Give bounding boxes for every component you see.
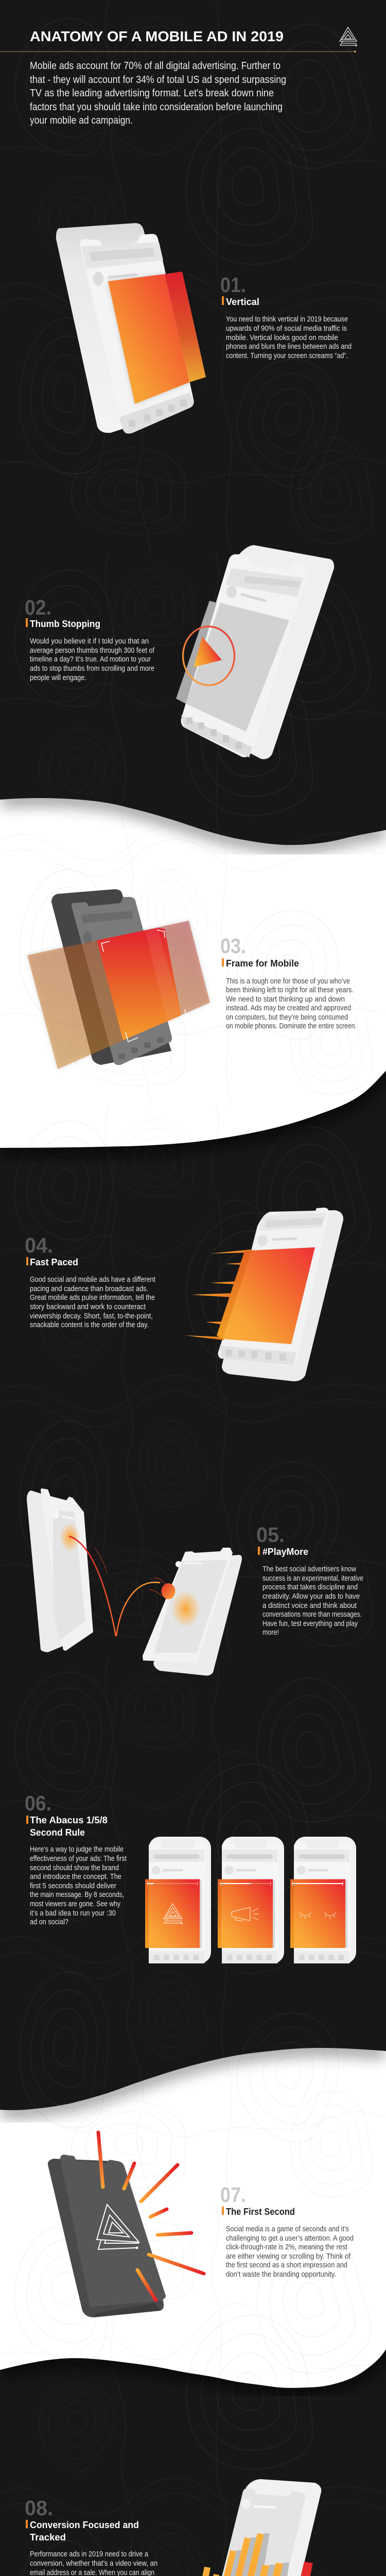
section 07 text: click-through-rate is 2%, meaning the rest xyxy=(226,2243,347,2251)
section 07 text xyxy=(220,2183,354,2279)
section 05 text: #PlayMore xyxy=(262,1547,308,1557)
section 06 text xyxy=(25,1791,127,1926)
section 04 text: viewership decay. Short, fast, to-the-point, xyxy=(30,1312,153,1320)
section 06 text: most viewers are gone. See why xyxy=(30,1900,121,1908)
section 06 text: ad on social? xyxy=(30,1918,68,1926)
section 05 text: process that takes discipline and xyxy=(262,1583,358,1591)
section 01 text: phones and blurs the lines between ads and xyxy=(226,343,352,351)
section 07 text: are either viewing or scrolling by. Think of xyxy=(226,2252,351,2261)
section 07 text: don’t waste the branding opportunity. xyxy=(226,2270,336,2279)
section 06 text: 06. xyxy=(25,1791,51,1815)
section 05 text xyxy=(256,1523,363,1637)
section 06 text: second should show the brand xyxy=(30,1864,119,1872)
section 06 text: the main message. By 8 seconds, xyxy=(30,1891,124,1899)
section 08 text xyxy=(25,2496,157,2576)
section 06 text: first 5 seconds should deliver xyxy=(30,1882,116,1890)
section 03 text: instead. Ads may be created and approved xyxy=(226,1004,351,1012)
icon: brand logo top xyxy=(340,27,357,46)
intro text: your mobile ad campaign. xyxy=(30,115,133,126)
section 02 text: timeline a day? It’s true. Ad motion to your xyxy=(30,655,151,664)
illustration: two phones with bouncing ball xyxy=(27,1488,242,1675)
section 03 text: Frame for Mobile xyxy=(226,958,299,969)
section 01 text: mobile. Vertical looks good on mobile xyxy=(226,334,338,342)
section 03 text: been thinking left to right for all these years. xyxy=(226,986,354,994)
intro text: that - they will account for 34% of total US ad spend surpassing xyxy=(30,74,286,86)
section 08 text: 08. xyxy=(25,2496,53,2520)
section 04 text: Good social and mobile ads have a different xyxy=(30,1276,155,1284)
intro text: Mobile ads account for 70% of all digital advertising. Further to xyxy=(30,60,280,72)
section 04 text: pacing and cadence than broadcast ads. xyxy=(30,1285,148,1293)
section 06 text: effectiveness of your ads: The first xyxy=(30,1855,127,1863)
section 05 text: creativity. Allow your ads to have xyxy=(262,1592,360,1601)
section 04 text xyxy=(25,1233,155,1329)
section 08 text: Conversion Focused and xyxy=(30,2520,139,2530)
section 07 text: 07. xyxy=(220,2183,246,2207)
illustration: dark phone with framed ad xyxy=(27,889,210,1069)
section 08 text: Tracked xyxy=(30,2532,66,2543)
section 04 text: snackable content is the order of the day. xyxy=(30,1321,149,1329)
section 02 text: Would you believe it if I told you that an xyxy=(30,637,149,646)
section 02 text: Thumb Stopping xyxy=(30,619,100,629)
section 01 text: You need to think vertical in 2019 because xyxy=(226,315,348,324)
section 06 text: The Abacus 1/5/8 xyxy=(30,1815,108,1825)
section 04 text: Fast Paced xyxy=(30,1257,78,1267)
illustration: thumb stopping phone with play button xyxy=(176,545,334,759)
section 02 text: ads to stop thumbs from scrolling and more xyxy=(30,665,154,673)
intro text xyxy=(30,60,286,126)
phone: eight seconds closed eyes xyxy=(290,1837,356,1963)
section 01 text: 01. xyxy=(220,273,246,297)
section 04 text: story backward and work to counteract xyxy=(30,1303,146,1311)
section 04 text: Great mobile ads pulse information, tell the xyxy=(30,1294,155,1302)
section 07 text: the first second as a short impression and xyxy=(226,2261,347,2269)
title: ANATOMY OF A MOBILE AD IN 2019 xyxy=(30,28,284,44)
section 03 text xyxy=(220,934,357,1030)
section 03 text: on mobile phones. Dominate the entire screen. xyxy=(226,1022,357,1030)
section 06 text: Here’s a way to judge the mobile xyxy=(30,1845,124,1854)
section 03 text: 03. xyxy=(220,934,246,958)
section 03 text: We need to start thinking up and down xyxy=(226,995,345,1004)
title rule xyxy=(0,50,356,53)
section 05 text: Have fun, test everything and play xyxy=(262,1620,358,1628)
illustration: phone with bar chart xyxy=(179,2479,321,2576)
illustration: vertical phone with ad xyxy=(56,223,206,434)
phone: five seconds message xyxy=(218,1837,284,1963)
section 01 text xyxy=(220,273,352,360)
section 05 text: a distinct voice and think about xyxy=(262,1602,357,1610)
section 05 text: 05. xyxy=(256,1523,285,1547)
intro text: factors that you should take into consideration before launching xyxy=(30,101,283,113)
section 07 text: Social media is a game of seconds and it’s xyxy=(226,2225,349,2233)
section 02 text xyxy=(25,596,155,682)
section 07 text: The First Second xyxy=(226,2207,295,2217)
white wave panel: frame for mobile xyxy=(0,798,386,1148)
section 05 text: more! xyxy=(262,1629,279,1637)
section 07 text: challenging to get a user’s attention. A good xyxy=(226,2234,354,2243)
intro text: TV as the leading advertising format. Let's break down nine xyxy=(30,88,274,99)
section 03 text: This is a tough one for those of you who’ve xyxy=(226,977,350,986)
section 08 text: conversion, whether that’s a video view, an xyxy=(30,2560,157,2568)
section 02 text: average person thumbs through 300 feet of xyxy=(30,647,155,655)
section 01 text: upwards of 90% of social media traffic is xyxy=(226,325,347,333)
section 06 text: it’s a bad idea to run your :30 xyxy=(30,1909,116,1918)
section 08 text: Performance ads in 2019 need to drive a xyxy=(30,2550,149,2558)
phone: first second brand xyxy=(145,1837,211,1963)
section 02 text: people will engage. xyxy=(30,674,86,682)
illustration: dark phone with logo and rays xyxy=(48,2132,204,2317)
section 05 text: success is an experimental, iterative xyxy=(262,1574,363,1583)
section 03 text: on computers, but they’re being consumed xyxy=(226,1013,348,1022)
section 05 text: conversations more than messages. xyxy=(262,1611,362,1619)
section 06 text: and introduce the concept. The xyxy=(30,1873,121,1881)
section 05 text: The best social advertisers know xyxy=(262,1565,356,1573)
section 06 text: Second Rule xyxy=(30,1827,85,1838)
illustration: fast paced phone with speed lines xyxy=(185,1208,343,1381)
section 04 text: 04. xyxy=(25,1233,53,1257)
section 01 text: Vertical xyxy=(226,297,259,307)
section 02 text: 02. xyxy=(25,596,51,619)
white wave panel: the first second xyxy=(0,2048,386,2388)
section 01 text: content. Turning your screen screams “ad”. xyxy=(226,352,348,360)
